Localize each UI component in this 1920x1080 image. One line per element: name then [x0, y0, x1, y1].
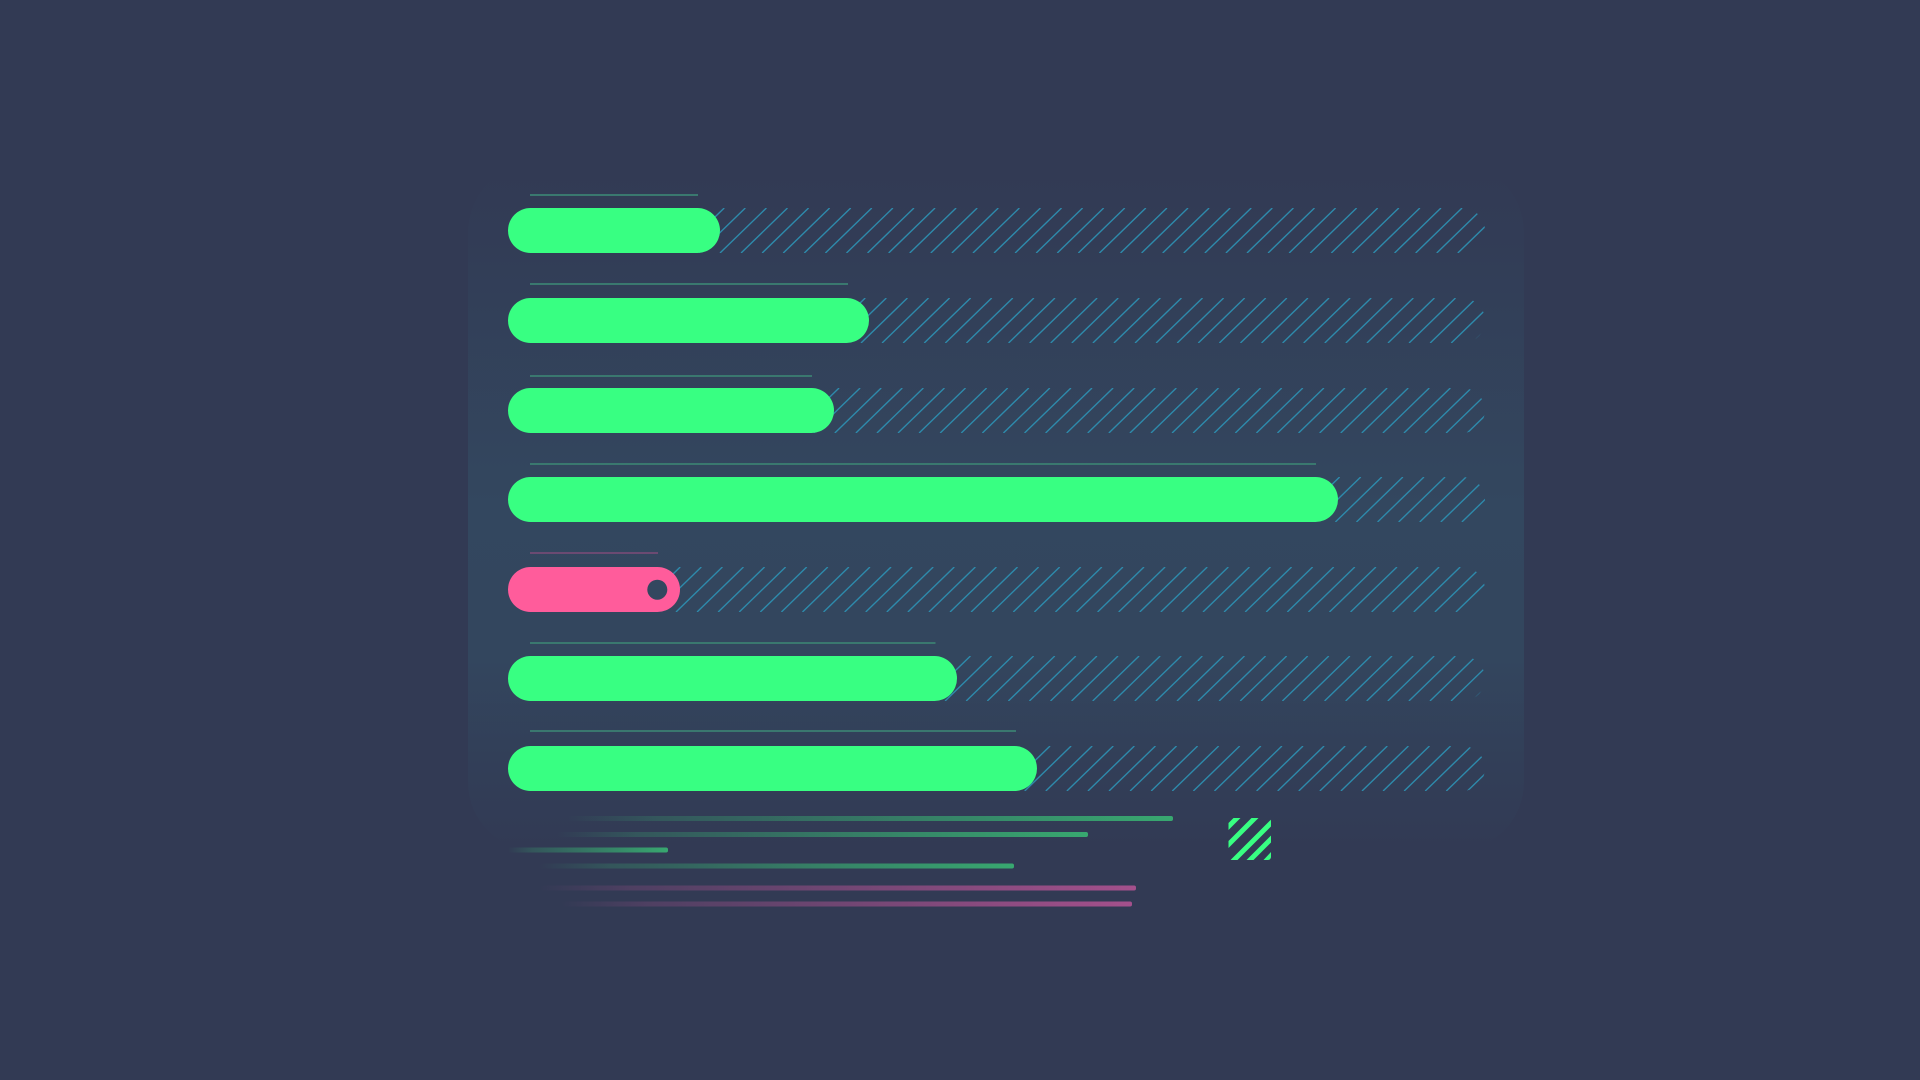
- row 4: green bar: [508, 463, 1529, 522]
- legend line green 4: [539, 864, 1014, 868]
- row 2 hatched track: [860, 298, 1484, 343]
- row 7 value bar: [508, 746, 1037, 791]
- legend line pink 2: [561, 902, 1132, 906]
- legend: fading lines: [508, 816, 1173, 906]
- row 3: green bar: [508, 375, 1514, 433]
- row 4 value bar: [508, 477, 1338, 522]
- icon: hatched square: [1228, 818, 1271, 860]
- row 2 label line: [530, 283, 848, 285]
- legend line pink 1: [539, 886, 1136, 890]
- row 3 value bar: [508, 388, 834, 433]
- row 1: green bar: [508, 194, 1525, 253]
- row 7 hatched track: [1004, 746, 1514, 791]
- row 6 label line: [530, 642, 936, 644]
- row 2: green bar: [508, 283, 1519, 343]
- row 1 value bar: [508, 208, 720, 253]
- row 6 value bar: [508, 656, 957, 701]
- row 1 hatched track: [678, 208, 1525, 253]
- row 4 label line: [530, 463, 1316, 465]
- legend line green 3: [508, 848, 668, 852]
- row 5: pink bar with marker: [508, 552, 1523, 612]
- row 6: green bar: [508, 642, 1519, 701]
- row 2 value bar: [508, 298, 869, 343]
- row 5 hatched track: [634, 567, 1523, 612]
- row 7: green bar: [508, 730, 1514, 791]
- row 3 label line: [530, 375, 812, 377]
- panel: background card: [468, 162, 1524, 852]
- row 7 label line: [530, 730, 1016, 732]
- row 1 label line: [530, 194, 698, 196]
- legend line green 2: [557, 832, 1088, 837]
- row 5 marker dot: [647, 580, 667, 600]
- row 4 hatched track: [1332, 477, 1485, 522]
- row 5 value bar: [508, 567, 680, 612]
- row 6 hatched track: [924, 656, 1519, 701]
- row 3 hatched track: [793, 388, 1514, 433]
- legend line green 1: [566, 816, 1173, 821]
- row 5 label line: [530, 552, 658, 554]
